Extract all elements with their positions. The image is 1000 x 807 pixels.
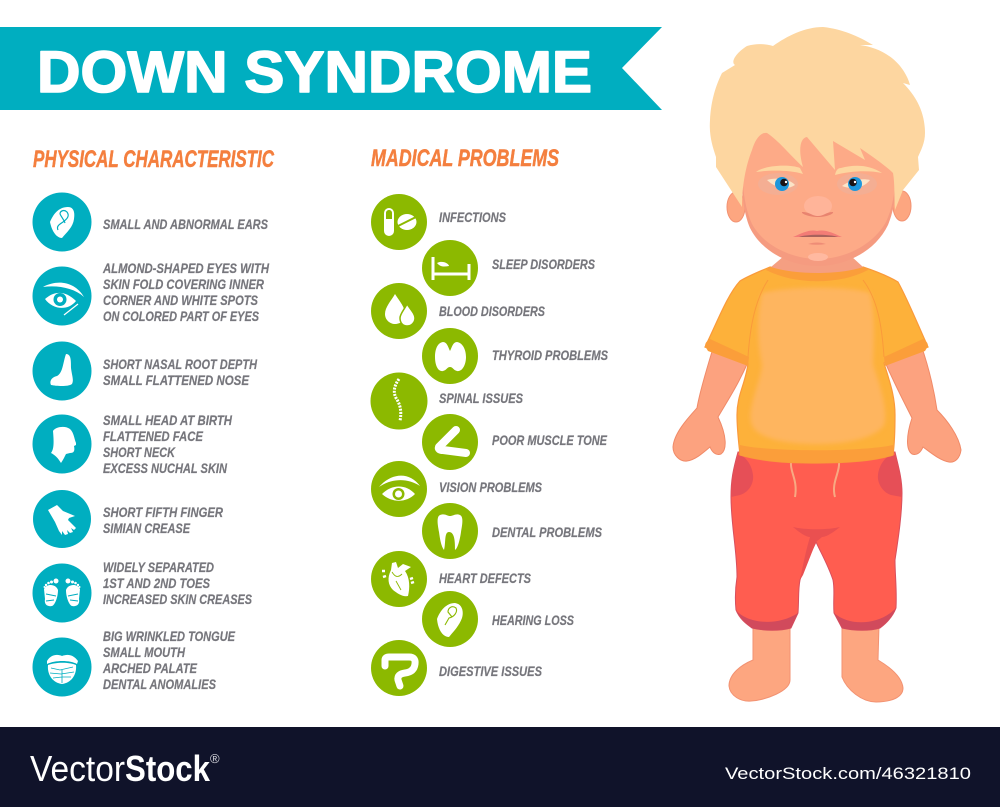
- title text: DOWN SYNDROME: [37, 40, 592, 105]
- item: tongue: BIG WRINKLED TONGUE: [103, 629, 236, 644]
- item: feet: [32, 560, 252, 622]
- chin highlight: [808, 253, 828, 261]
- item: nose: [32, 342, 257, 400]
- footer url: VectorStock.com/46321810: [725, 764, 971, 783]
- item: hearing loss: HEARING LOSS: [492, 613, 574, 628]
- raglan seams: [748, 280, 884, 357]
- collar: [766, 267, 868, 281]
- item: infections: INFECTIONS: [439, 210, 506, 225]
- item: feet: INCREASED SKIN CREASES: [103, 592, 252, 607]
- item: eyes: SKIN FOLD COVERING INNER: [103, 277, 264, 292]
- item: hand: [33, 490, 223, 548]
- shirt: [705, 267, 928, 463]
- item: digestive issues: DIGESTIVE ISSUES: [439, 664, 542, 679]
- item: head: FLATTENED FACE: [103, 429, 204, 444]
- face: [741, 125, 897, 266]
- mouth: [793, 230, 842, 245]
- item: eyes: ALMOND-SHAPED EYES WITH: [102, 261, 269, 276]
- item: eyes: ON COLORED PART OF EYES: [103, 309, 259, 324]
- item: tongue: SMALL MOUTH: [103, 645, 185, 660]
- pants: [731, 452, 902, 630]
- item: eyes: [32, 261, 269, 326]
- item: eyes: CORNER AND WHITE SPOTS: [103, 293, 258, 308]
- heading: physical characteristic: PHYSICAL CHARACTERISTIC: [33, 146, 274, 173]
- item: heart defects: [371, 551, 531, 607]
- item: head: [32, 413, 232, 476]
- left ear: [727, 192, 745, 222]
- crotch shadow: [793, 527, 840, 580]
- panel: physical characteristics: [32, 146, 274, 696]
- item: poor muscle tone: POOR MUSCLE TONE: [492, 433, 608, 448]
- neck: [771, 256, 863, 273]
- heading: madical problems: MADICAL PROBLEMS: [371, 145, 559, 172]
- item: hand: SIMIAN CREASE: [103, 521, 191, 536]
- item: hearing loss: [422, 591, 574, 647]
- item: spinal issues: [370, 372, 523, 430]
- item: ears: [32, 192, 268, 252]
- item: vision problems: VISION PROBLEMS: [439, 480, 542, 495]
- registered mark: ®: [210, 751, 220, 766]
- eyebrows: [756, 166, 882, 175]
- left arm: [673, 345, 748, 461]
- item: tongue: ARCHED PALATE: [102, 661, 198, 676]
- item: sleep disorders: [422, 240, 595, 296]
- right arm: [885, 345, 961, 462]
- drawstrings: [791, 463, 839, 497]
- shirt front highlight: [751, 288, 885, 444]
- item: heart defects: HEART DEFECTS: [439, 571, 531, 586]
- face light: [742, 125, 896, 259]
- panel: medical problems: [370, 145, 608, 696]
- right leg and foot: [842, 625, 903, 702]
- right sleeve cuff: [884, 339, 928, 366]
- item: poor muscle tone: [422, 414, 608, 470]
- pockets: [731, 455, 902, 497]
- nose: [802, 196, 833, 217]
- item: spinal issues: SPINAL ISSUES: [439, 391, 523, 406]
- item: blood disorders: BLOOD DISORDERS: [439, 304, 545, 319]
- item: feet: 1ST AND 2ND TOES: [103, 576, 210, 591]
- pants cuffs: [736, 608, 896, 630]
- item: ears: SMALL AND ABNORMAL EARS: [103, 217, 268, 232]
- item: nose: SMALL FLATTENED NOSE: [103, 373, 250, 388]
- item: blood disorders: [371, 283, 545, 339]
- left eye: [758, 173, 798, 195]
- right ear: [893, 191, 911, 221]
- item: tongue: [32, 629, 236, 696]
- item: dental problems: DENTAL PROBLEMS: [492, 525, 602, 540]
- item: vision problems: [371, 461, 542, 517]
- left leg and foot: [729, 625, 790, 701]
- item: nose: SHORT NASAL ROOT DEPTH: [103, 357, 257, 372]
- item: dental problems: [422, 503, 602, 559]
- hair: [710, 27, 925, 210]
- item: thyroid problems: [422, 328, 608, 384]
- footer logo: Stock: [125, 748, 211, 789]
- left sleeve cuff: [705, 339, 749, 366]
- title banner: [0, 27, 662, 110]
- item: feet: WIDELY SEPARATED: [103, 560, 214, 575]
- shirt hem: [740, 445, 893, 463]
- item: digestive issues: [371, 640, 542, 696]
- illustration: child: [673, 27, 961, 702]
- item: thyroid problems: THYROID PROBLEMS: [492, 348, 608, 363]
- item: tongue: DENTAL ANOMALIES: [103, 677, 216, 692]
- item: head: EXCESS NUCHAL SKIN: [103, 461, 227, 476]
- item: head: SHORT NECK: [103, 445, 176, 460]
- item: hand: SHORT FIFTH FINGER: [103, 505, 223, 520]
- item: sleep disorders: SLEEP DISORDERS: [492, 257, 595, 272]
- item: infections: [371, 194, 506, 250]
- footer logo: Vector: [30, 748, 125, 789]
- item: head: SMALL HEAD AT BIRTH: [103, 413, 232, 428]
- footer bar: [0, 727, 1000, 807]
- right eye: [837, 173, 877, 195]
